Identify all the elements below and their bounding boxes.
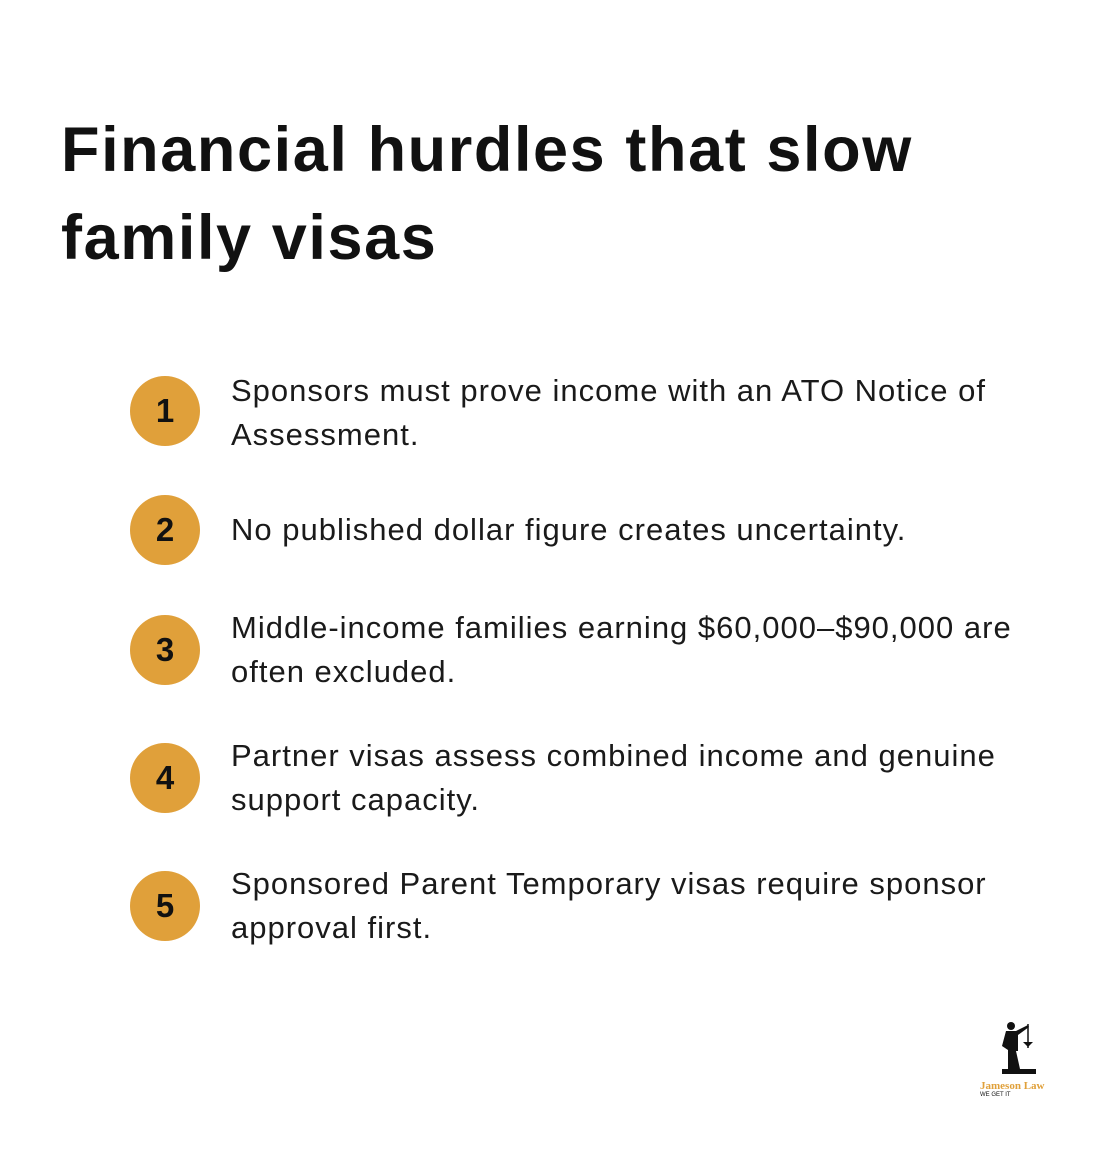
title bbox=[61, 115, 913, 273]
logo bbox=[980, 1022, 1044, 1098]
item 3: Middle-income families earning $60,000–$90,000 are bbox=[231, 610, 1012, 645]
logo: Jameson Law bbox=[980, 1080, 1044, 1092]
item 3: 3 bbox=[156, 631, 174, 668]
item 5: approval first. bbox=[231, 910, 432, 945]
item 2 bbox=[130, 495, 906, 565]
item 4: 4 bbox=[156, 759, 174, 796]
item 1: 1 bbox=[156, 392, 174, 429]
item 5 bbox=[130, 866, 987, 945]
title: family visas bbox=[61, 203, 437, 273]
logo: WE GET IT bbox=[980, 1092, 1011, 1098]
item 1: Assessment. bbox=[231, 417, 419, 452]
item 4 bbox=[130, 738, 996, 817]
item 5: 5 bbox=[156, 887, 174, 924]
title: Financial hurdles that slow bbox=[61, 115, 913, 185]
item 4: Partner visas assess combined income and genuine bbox=[231, 738, 996, 773]
item 1: Sponsors must prove income with an ATO Notice of bbox=[231, 373, 986, 408]
item 4: support capacity. bbox=[231, 782, 480, 817]
item 5: Sponsored Parent Temporary visas require sponsor bbox=[231, 866, 987, 901]
item 2: 2 bbox=[156, 511, 174, 548]
item 3 bbox=[130, 610, 1012, 689]
item 3: often excluded. bbox=[231, 654, 456, 689]
item 1 bbox=[130, 373, 986, 452]
item 2: No published dollar figure creates uncertainty. bbox=[231, 512, 906, 547]
